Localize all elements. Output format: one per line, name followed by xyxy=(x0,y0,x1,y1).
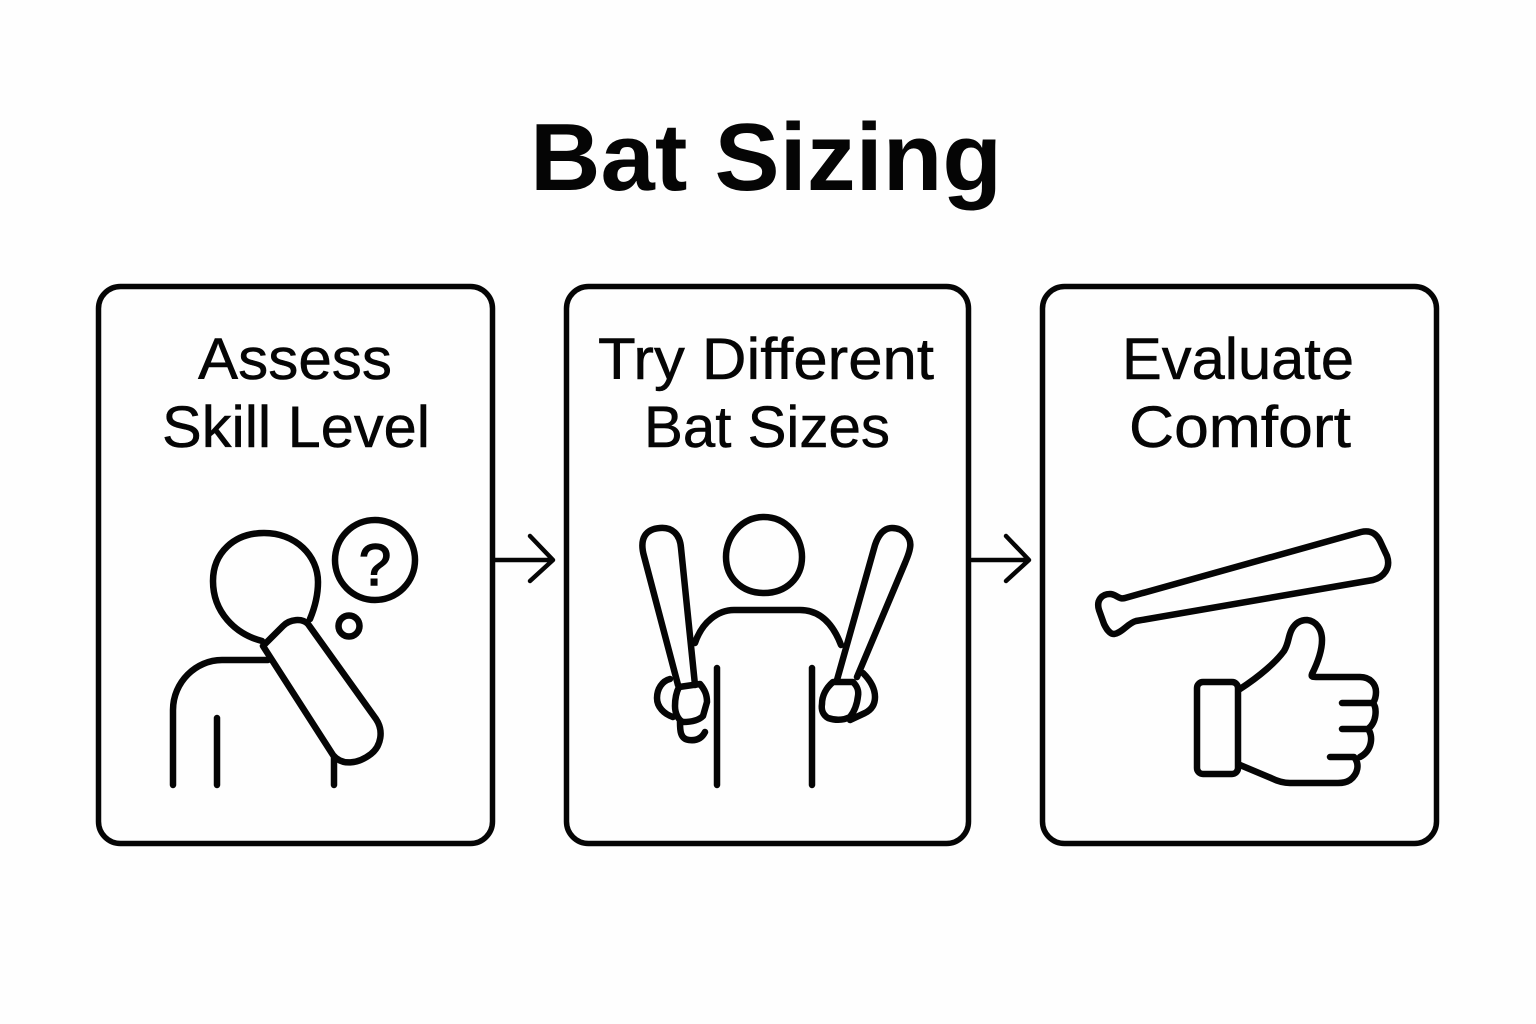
icon: baseball bat xyxy=(1098,531,1388,634)
icon: thinking person: ? xyxy=(359,533,391,598)
heading: evaluate comfort xyxy=(1122,327,1354,460)
heading: assess skill level: Skill Level xyxy=(162,395,430,460)
heading: try different bat sizes: Bat Sizes xyxy=(644,395,890,460)
arrow: step two to three xyxy=(972,536,1029,581)
panel: assess skill level xyxy=(98,286,492,844)
panel: try different bat sizes xyxy=(566,286,968,844)
icon: person holding two bats xyxy=(642,517,910,785)
icon: thinking person xyxy=(173,520,415,785)
icon: thumbs up xyxy=(1197,620,1376,783)
panel: evaluate comfort xyxy=(1042,286,1436,844)
heading: evaluate comfort: Comfort xyxy=(1129,395,1351,460)
heading: assess skill level: Assess xyxy=(198,327,392,392)
heading: try different bat sizes xyxy=(598,327,934,460)
heading: evaluate comfort: Evaluate xyxy=(1122,327,1354,392)
heading: assess skill level xyxy=(162,327,430,460)
title: Bat Sizing xyxy=(530,104,1002,211)
arrow: step one to two xyxy=(495,536,553,581)
heading: try different bat sizes: Try Different xyxy=(598,327,934,392)
